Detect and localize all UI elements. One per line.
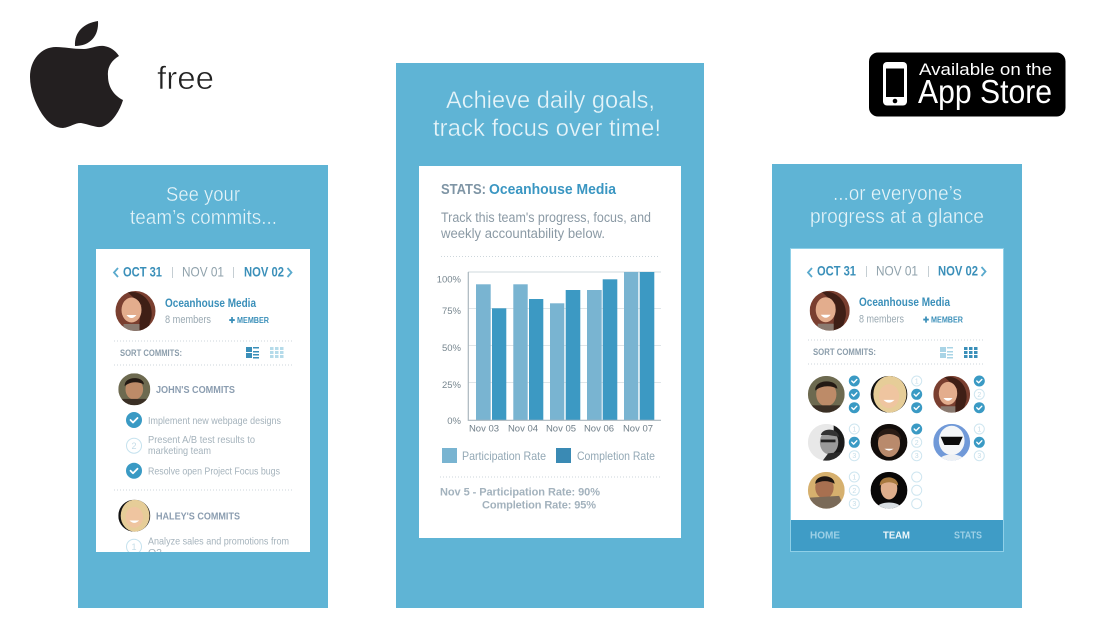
heading: everyone's progress bbox=[810, 182, 984, 228]
price label: free: free bbox=[157, 60, 214, 96]
y axis labels: 0% bbox=[447, 416, 462, 427]
legend bbox=[442, 448, 655, 463]
phone card: stats bbox=[419, 166, 681, 538]
selected day rates bbox=[440, 486, 600, 512]
member: team lead: 2 bbox=[977, 392, 981, 399]
member: white helmet: 3 bbox=[977, 453, 981, 460]
badge: App Store bbox=[869, 52, 1066, 116]
commit: A/B test results: 2 bbox=[131, 441, 137, 451]
legend: Participation Rate bbox=[462, 449, 546, 463]
x axis labels: Nov 07 bbox=[623, 424, 653, 435]
y axis labels: 100% bbox=[437, 274, 462, 286]
badge: App Store: Available on the bbox=[919, 60, 1052, 79]
panel: team's commits screen bbox=[78, 165, 328, 608]
member: tan background portrait: 1 bbox=[852, 474, 856, 482]
stats title: Oceanhouse Media bbox=[489, 182, 617, 198]
team name and members bbox=[859, 297, 963, 326]
heading: achieve daily goals: track focus over time! bbox=[433, 115, 661, 142]
bottom navigation bar: STATS bbox=[954, 530, 982, 542]
heading: everyone's progress: ...or everyone’s bbox=[833, 182, 962, 205]
y axis labels: 75% bbox=[442, 306, 462, 317]
heading: achieve daily goals bbox=[433, 87, 661, 142]
bottom navigation bar: HOME bbox=[810, 530, 840, 542]
icon: list view bbox=[940, 347, 953, 358]
member: tan background portrait bbox=[808, 472, 859, 509]
y axis labels: 25% bbox=[442, 380, 462, 391]
sort commits row: SORT COMMITS: bbox=[120, 348, 182, 358]
member: dark background portrait bbox=[871, 424, 922, 461]
member: Haley bbox=[871, 376, 922, 413]
selected day rates: Completion Rate: 95% bbox=[482, 500, 596, 512]
date selector: NOV 01 bbox=[182, 264, 224, 280]
commit: analyze sales: 1 bbox=[131, 542, 137, 552]
date selector bbox=[808, 262, 986, 278]
avatar: John bbox=[118, 373, 150, 405]
panel: stats screen bbox=[396, 63, 704, 608]
stats title: STATS: bbox=[441, 182, 486, 198]
icon: grid view bbox=[270, 347, 284, 358]
heading: everyone's progress: progress at a glance bbox=[810, 205, 984, 228]
date selector: NOV 02 bbox=[244, 264, 284, 280]
date selector: NOV 01 bbox=[876, 262, 918, 278]
heading: achieve daily goals: Achieve daily goals, bbox=[446, 87, 655, 114]
legend: Completion Rate bbox=[577, 449, 655, 463]
x axis labels: Nov 06 bbox=[584, 424, 614, 435]
commit: resolve bugs: Resolve open Project Focus bugs bbox=[148, 466, 280, 478]
commit: implement designs bbox=[126, 412, 281, 428]
date selector: OCT 31 bbox=[123, 264, 162, 280]
member: dark background portrait: 3 bbox=[915, 453, 919, 460]
selected day rates: Nov 5 - Participation Rate: 90% bbox=[440, 486, 600, 498]
icon: phone bbox=[883, 62, 907, 106]
badge: App Store: App Store bbox=[918, 73, 1052, 110]
member: blond portrait bbox=[871, 472, 922, 509]
team name and members: Oceanhouse Media bbox=[165, 298, 257, 310]
team name and members: Oceanhouse Media bbox=[859, 297, 951, 309]
bottom navigation bar bbox=[791, 520, 1003, 551]
heading: Haley's commits: HALEY'S COMMITS bbox=[156, 510, 240, 522]
stats description: Track this team's progress, focus, and bbox=[441, 210, 651, 225]
y axis labels: 50% bbox=[442, 343, 462, 354]
commit: A/B test results bbox=[126, 436, 255, 456]
team name and members: ✚ MEMBER bbox=[923, 316, 963, 324]
date selector bbox=[112, 267, 293, 278]
commit: A/B test results: marketing team bbox=[148, 445, 211, 457]
member: Haley: 1 bbox=[915, 378, 919, 386]
commit: A/B test results: Present A/B test results to bbox=[148, 434, 255, 446]
x axis labels: Nov 04 bbox=[508, 424, 538, 435]
member: white helmet bbox=[933, 424, 985, 461]
member: team lead bbox=[933, 376, 985, 413]
x axis labels: Nov 03 bbox=[469, 424, 499, 435]
avatar: Haley bbox=[118, 500, 150, 532]
stats description bbox=[440, 210, 651, 241]
phone card: commits list bbox=[96, 249, 310, 559]
team name and members: 8 members bbox=[859, 314, 904, 326]
member: John bbox=[808, 376, 860, 413]
commit: analyze sales: Analyze sales and promotions from bbox=[148, 536, 289, 548]
member: grayscale portrait: 3 bbox=[852, 453, 856, 460]
bar chart bbox=[437, 272, 661, 435]
x axis labels: Nov 05 bbox=[546, 424, 576, 435]
icon: apple logo bbox=[30, 21, 123, 128]
icon: grid view bbox=[964, 347, 978, 358]
member: tan background portrait: 3 bbox=[852, 501, 856, 508]
commit: implement designs: Implement new webpage designs bbox=[148, 415, 281, 427]
team name and members: ✚ MEMBER bbox=[229, 316, 269, 325]
icon: list view bbox=[246, 347, 259, 358]
bottom navigation bar: TEAM bbox=[883, 530, 910, 542]
avatar: team bbox=[810, 291, 850, 331]
commit: analyze sales bbox=[126, 537, 288, 552]
date selector: NOV 02 bbox=[938, 262, 978, 278]
member: grayscale portrait: 1 bbox=[852, 426, 856, 434]
member: tan background portrait: 2 bbox=[852, 488, 856, 495]
team member grid bbox=[808, 376, 985, 509]
member: white helmet: 1 bbox=[977, 426, 981, 434]
avatar: team bbox=[116, 291, 156, 331]
heading: see your team's commits bbox=[130, 183, 277, 229]
sort commits row bbox=[813, 347, 978, 358]
phone card: team grid bbox=[790, 248, 1004, 552]
team name and members: 8 members bbox=[165, 314, 211, 326]
member: dark background portrait: 2 bbox=[915, 440, 919, 447]
commit: analyze sales: Q2 bbox=[148, 547, 162, 559]
heading: see your team's commits: See your bbox=[166, 183, 240, 206]
y axis labels bbox=[437, 274, 462, 427]
completion rate bars bbox=[492, 272, 654, 420]
date selector: OCT 31 bbox=[817, 262, 856, 278]
sort commits row bbox=[120, 347, 284, 358]
x axis labels bbox=[469, 424, 653, 435]
panel: team glance screen bbox=[772, 164, 1022, 608]
commit: resolve bugs bbox=[126, 463, 280, 479]
sort commits row: SORT COMMITS: bbox=[813, 347, 876, 357]
stats description: weekly accountability below. bbox=[440, 226, 605, 241]
member: grayscale portrait bbox=[808, 424, 860, 461]
heading: John's commits: JOHN'S COMMITS bbox=[156, 384, 235, 396]
team name and members bbox=[165, 298, 269, 326]
participation rate bars bbox=[476, 272, 638, 420]
heading: see your team's commits: team’s commits... bbox=[130, 206, 277, 229]
